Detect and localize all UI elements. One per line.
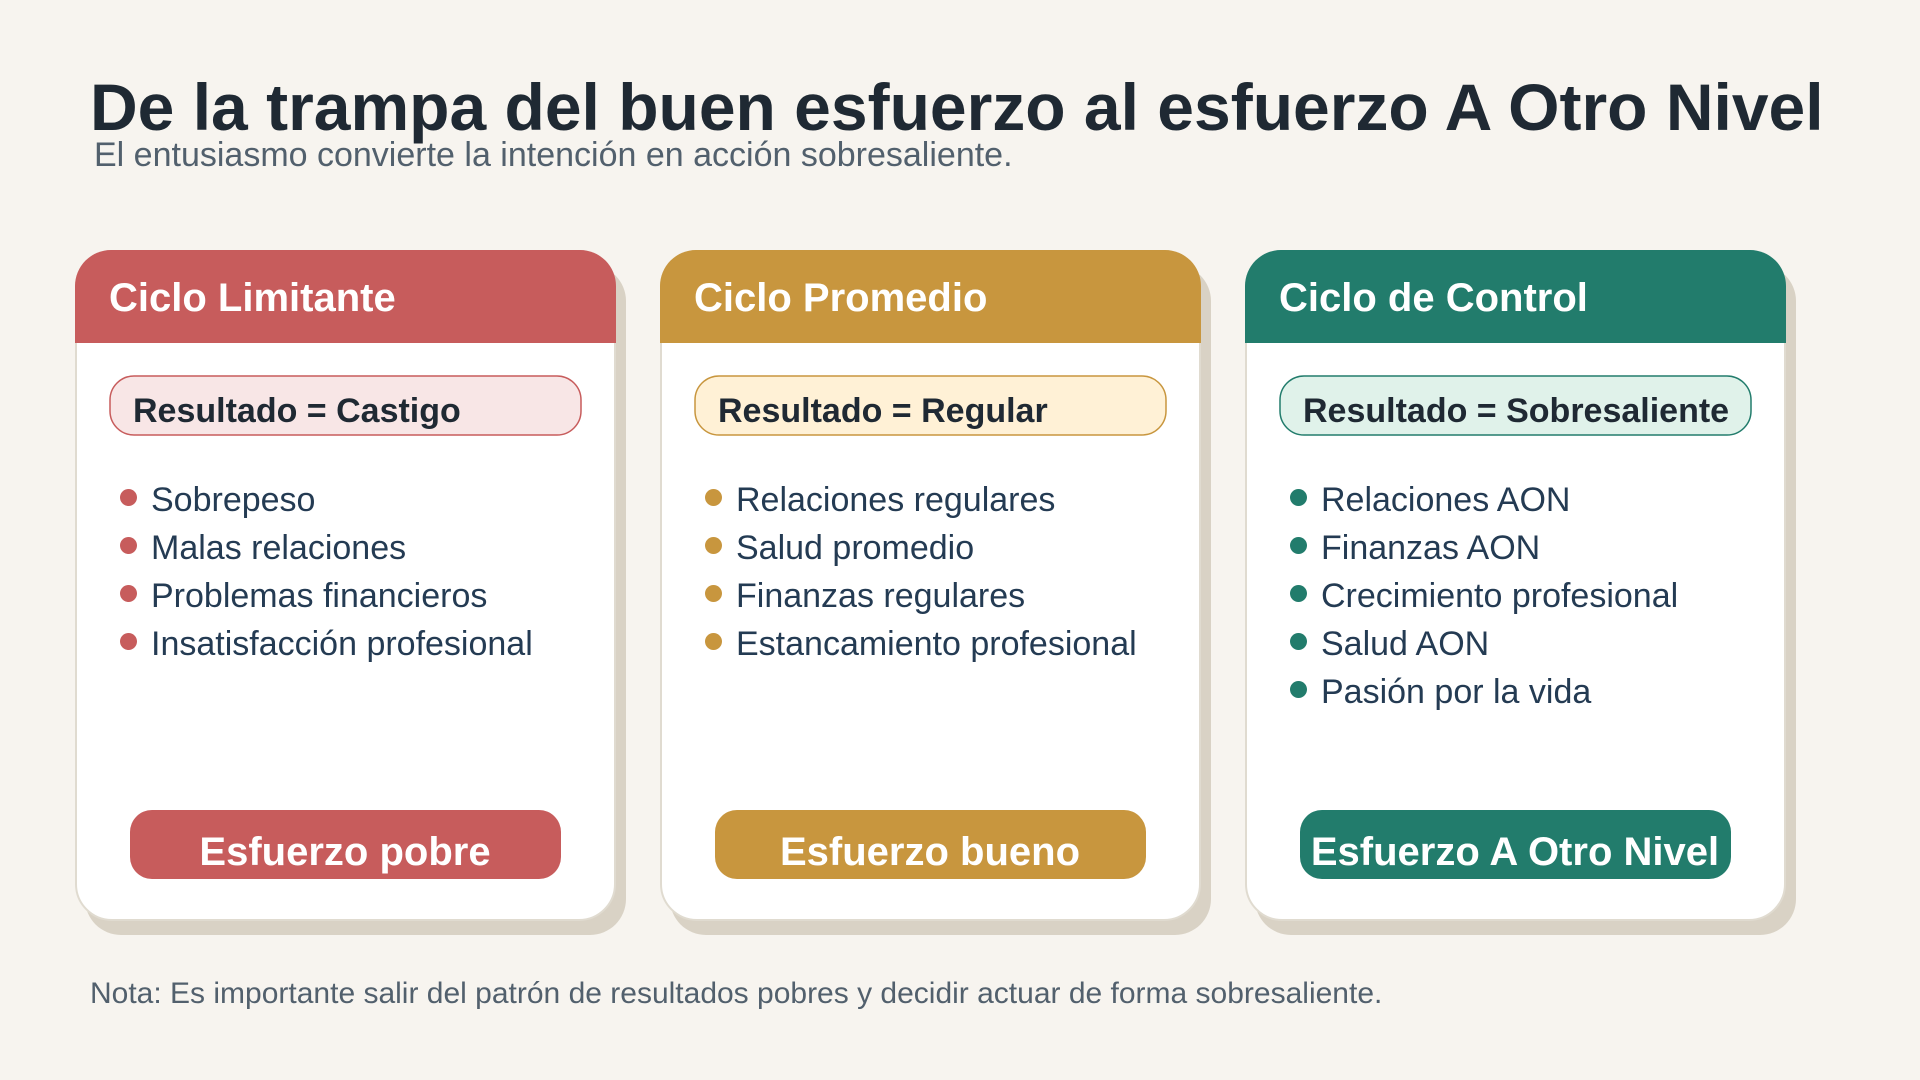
result: Sobresaliente	[1280, 376, 1751, 435]
button: Esfuerzo pobre: Esfuerzo pobre	[199, 830, 491, 874]
button: Esfuerzo bueno	[715, 810, 1146, 879]
list: Ciclo Promedio: Estancamiento profesional	[736, 625, 1137, 663]
header: Ciclo Limitante: Ciclo Limitante	[109, 276, 396, 320]
footnote: Nota: Es importante salir del patrón de resultados pobres y decidir actuar de forma sobresaliente.	[90, 977, 1382, 1010]
header: Ciclo Promedio	[660, 250, 1201, 343]
result: Regular	[695, 376, 1166, 435]
list: Ciclo Promedio: Relaciones regulares	[736, 481, 1055, 519]
panel: Ciclo Promedio	[660, 250, 1211, 935]
list: Ciclo de Control: Finanzas AON	[1321, 529, 1540, 567]
list: Ciclo Limitante	[120, 481, 533, 663]
header: Ciclo Limitante	[75, 250, 616, 343]
list: Ciclo de Control	[1290, 481, 1678, 711]
result: Castigo	[110, 376, 581, 435]
panel: Ciclo Limitante	[75, 250, 626, 935]
list: Ciclo de Control: Relaciones AON	[1321, 481, 1570, 519]
header: Ciclo de Control	[1245, 250, 1786, 343]
list: Ciclo de Control: Pasión por la vida	[1321, 673, 1591, 711]
panel: Ciclo de Control	[1245, 250, 1796, 935]
result: Regular: Resultado = Regular	[718, 392, 1048, 430]
button: Esfuerzo pobre	[130, 810, 561, 879]
list: Ciclo de Control: Salud AON	[1321, 625, 1489, 663]
list: Ciclo Promedio	[705, 481, 1137, 663]
list: Ciclo Limitante: Malas relaciones	[151, 529, 406, 567]
list: Ciclo Limitante: Sobrepeso	[151, 481, 315, 519]
header: Ciclo de Control: Ciclo de Control	[1279, 276, 1588, 320]
list: Ciclo Promedio: Salud promedio	[736, 529, 974, 567]
title: De la trampa del buen esfuerzo al esfuerzo A Otro Nivel	[90, 70, 1824, 144]
list: Ciclo Limitante: Insatisfacción profesional	[151, 625, 533, 663]
button: Esfuerzo bueno: Esfuerzo bueno	[780, 830, 1080, 874]
subtitle: El entusiasmo convierte la intención en acción sobresaliente.	[94, 136, 1013, 174]
button: Esfuerzo A Otro Nivel: Esfuerzo A Otro Nivel	[1311, 830, 1719, 874]
list: Ciclo de Control: Crecimiento profesional	[1321, 577, 1678, 615]
list: Ciclo Promedio: Finanzas regulares	[736, 577, 1025, 615]
result: Castigo: Resultado = Castigo	[133, 392, 461, 430]
list: Ciclo Limitante: Problemas financieros	[151, 577, 487, 615]
header: Ciclo Promedio: Ciclo Promedio	[694, 276, 987, 320]
result: Sobresaliente: Resultado = Sobresaliente	[1303, 392, 1729, 430]
button: Esfuerzo A Otro Nivel	[1300, 810, 1731, 879]
